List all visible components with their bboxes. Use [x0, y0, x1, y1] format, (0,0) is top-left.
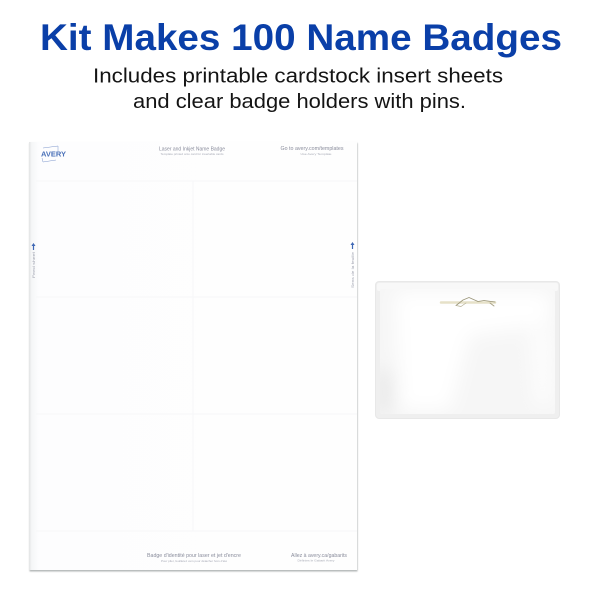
sheet footer center — [147, 553, 241, 563]
subtitle — [93, 66, 503, 113]
Avery logo — [41, 146, 66, 162]
sheet header right: Go to avery.com/templates — [280, 146, 344, 152]
safety pin — [441, 298, 495, 306]
sheet footer right — [291, 553, 348, 562]
Avery logo: AVERY — [41, 150, 66, 158]
right side label with arrow — [350, 242, 355, 288]
sheet header right — [280, 146, 344, 156]
right side label with arrow: Sens de la feuille — [350, 251, 355, 288]
sheet header center — [159, 146, 225, 156]
subtitle: and clear badge holders with pins. — [133, 91, 466, 113]
sheet header center: Laser and Inkjet Name Badge — [159, 146, 225, 152]
sheet footer right: Définies le Gabarit Avery — [298, 558, 335, 562]
title: Kit Makes 100 Name Badges — [40, 17, 562, 58]
sheet footer center: Badge d'identité pour laser et jet d'encre — [147, 553, 241, 559]
panel: insert sheet — [29, 142, 358, 572]
sheet header right: Use Avery Template — [300, 152, 332, 156]
left side label with arrow: Feed sheet — [31, 251, 36, 278]
panel: clear badge holder — [375, 281, 560, 419]
left side label with arrow — [31, 243, 36, 278]
sheet footer right: Allez à avery.ca/gabarits — [291, 553, 348, 559]
holder sheen — [380, 306, 534, 399]
subtitle: Includes printable cardstock insert sheets — [93, 66, 503, 88]
sheet header center: Template printed onto card for insertable cards — [160, 152, 224, 156]
sheet footer center: Pour plier, feuilletez vers pour détacher hors d'été — [161, 559, 227, 563]
